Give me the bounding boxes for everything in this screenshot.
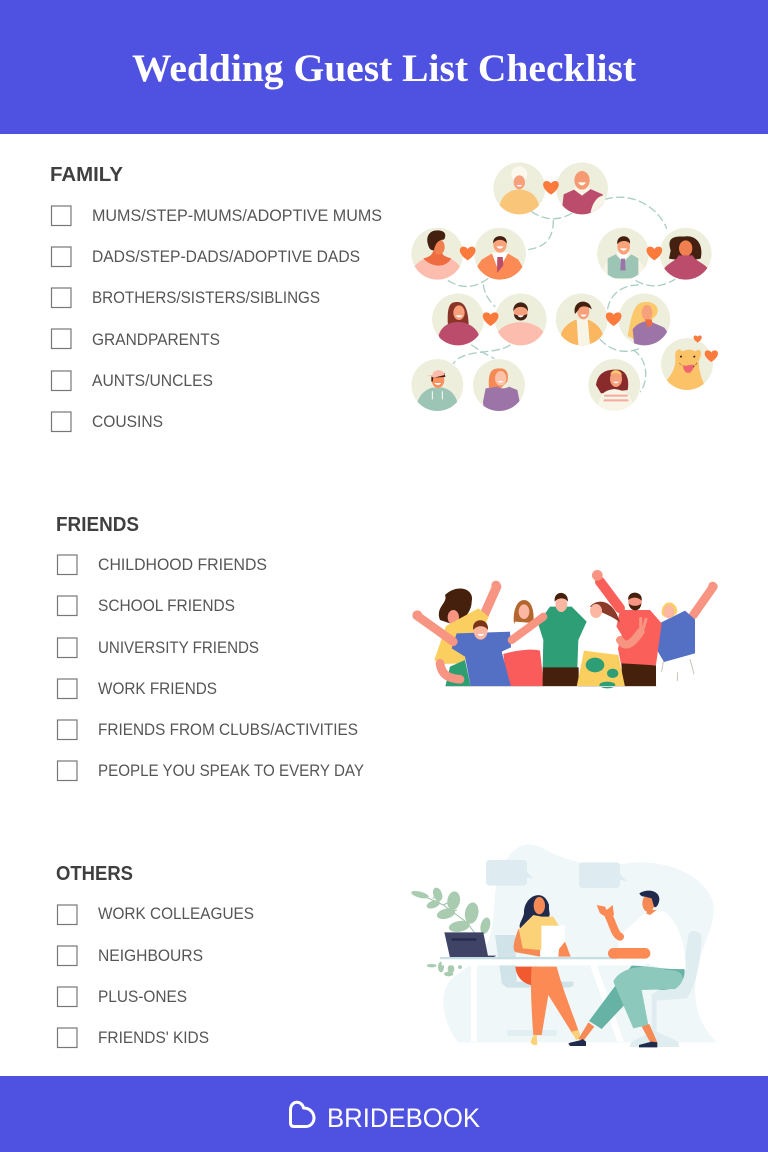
item: work colleagues (58, 904, 254, 924)
item: work colleagues: WORK COLLEAGUES (98, 904, 254, 923)
item: university friends: UNIVERSITY FRIENDS (98, 638, 259, 657)
item: friends' kids (58, 1028, 209, 1048)
item: grandparents (52, 329, 220, 349)
logo: wordmark: BRIDEBOOK (327, 1103, 480, 1133)
item: grandparents: GRANDPARENTS (92, 330, 220, 349)
item: work friends: WORK FRIENDS (98, 679, 217, 698)
item: neighbours: NEIGHBOURS (98, 946, 203, 965)
heading: others: OTHERS (56, 863, 133, 885)
panel: family checklist (50, 164, 382, 432)
heading: family: FAMILY (50, 164, 124, 186)
item: neighbours (58, 946, 203, 966)
item: friends' kids: FRIENDS' KIDS (98, 1028, 209, 1047)
item: school friends: SCHOOL FRIENDS (98, 596, 235, 615)
item: cousins: COUSINS (92, 412, 163, 431)
item: club friends: FRIENDS FROM CLUBS/ACTIVITIES (98, 720, 358, 739)
item: work friends (58, 679, 217, 698)
item: plus-ones: PLUS-ONES (98, 987, 187, 1006)
item: aunts and uncles (52, 371, 213, 390)
item: plus-ones (58, 987, 187, 1006)
item: aunts and uncles: AUNTS/UNCLES (92, 371, 213, 390)
item: people you speak to: PEOPLE YOU SPEAK TO EVERY DAY (98, 761, 364, 780)
illustration: two people talking at a desk (411, 844, 717, 1047)
item: mums: MUMS/STEP-MUMS/ADOPTIVE MUMS (92, 206, 382, 225)
panel: others checklist (56, 863, 254, 1048)
panel: friends checklist (56, 514, 364, 780)
illustration: group of friends (412, 570, 717, 688)
item: siblings: BROTHERS/SISTERS/SIBLINGS (92, 288, 320, 307)
item: cousins (52, 412, 163, 432)
illustration: family tree (411, 162, 718, 412)
item: dads: DADS/STEP-DADS/ADOPTIVE DADS (92, 247, 360, 266)
item: childhood friends: CHILDHOOD FRIENDS (98, 555, 267, 574)
title: Wedding Guest List Checklist (132, 47, 636, 90)
logo: bridebook heart (290, 1102, 314, 1126)
header band (0, 0, 768, 134)
heading: friends: FRIENDS (56, 514, 139, 536)
footer band (0, 1076, 768, 1152)
